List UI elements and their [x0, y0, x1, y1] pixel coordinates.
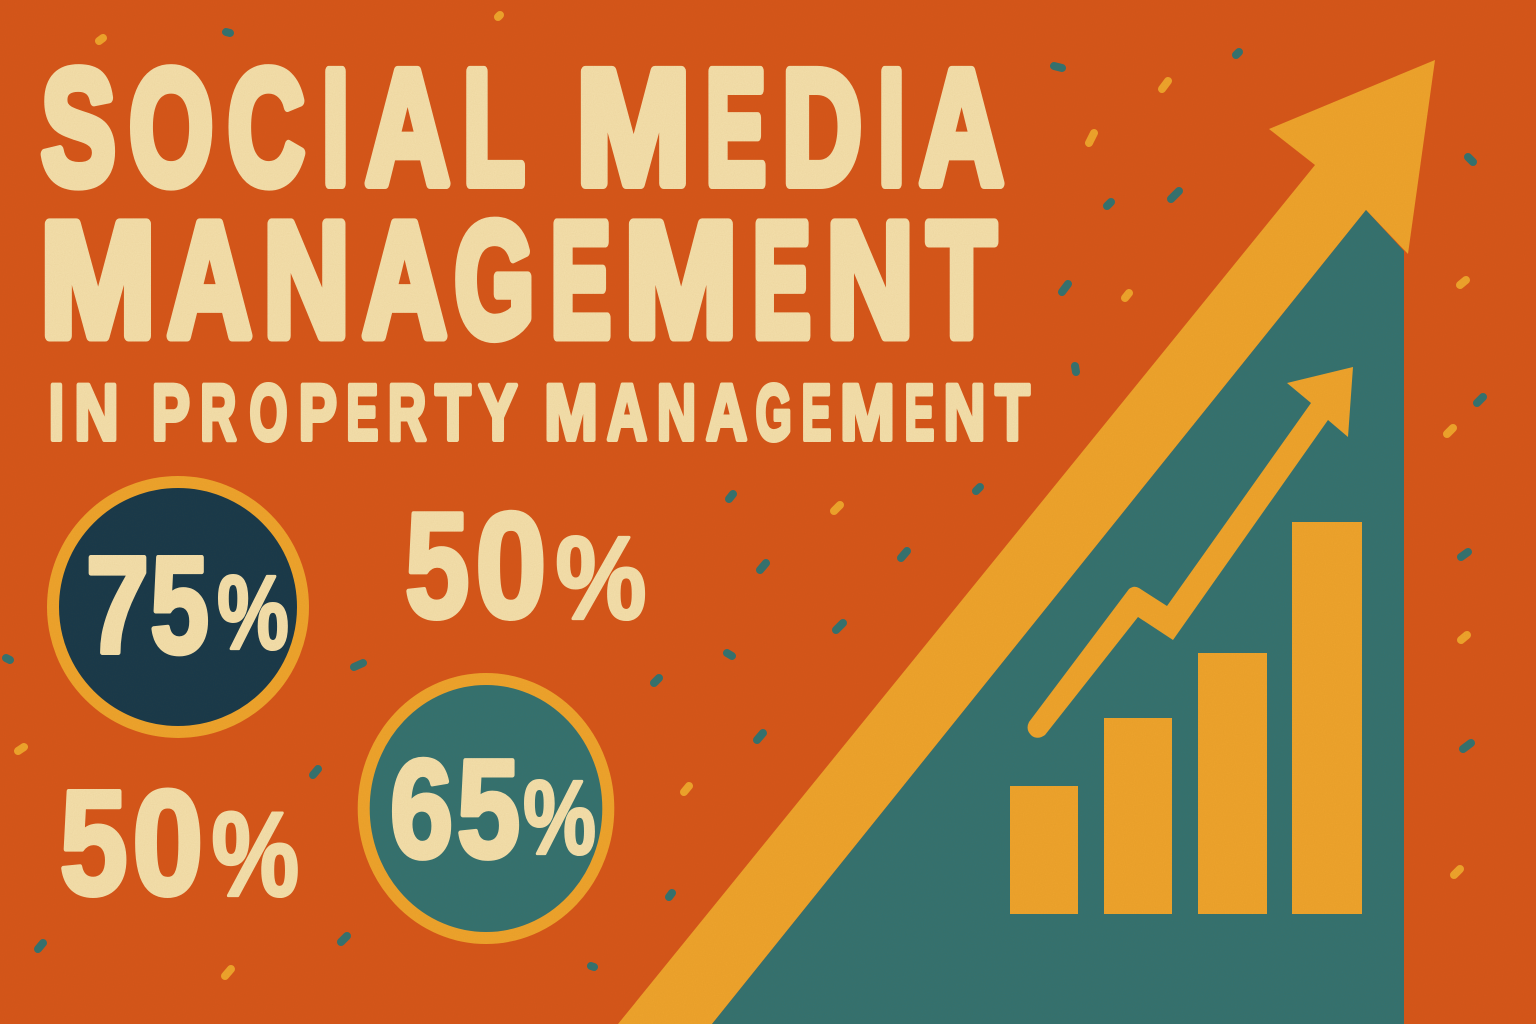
subtitle: N [657, 368, 696, 456]
title: S [41, 36, 116, 218]
title: M [40, 188, 156, 371]
title: M [624, 188, 737, 371]
teal triangle panel [712, 210, 1404, 1024]
title: A [362, 188, 447, 371]
subtitle: R [200, 368, 236, 456]
subtitle: T [435, 368, 471, 456]
subtitle: Y [479, 368, 517, 456]
subtitle: E [904, 368, 934, 456]
title: E [753, 188, 811, 371]
title: A [920, 36, 1004, 218]
subtitle: E [346, 368, 378, 456]
stat: 75% circle: % [217, 554, 289, 672]
stat: 65% circle: % [523, 760, 596, 876]
subtitle: R [388, 368, 426, 456]
title: T [927, 188, 996, 371]
title: N [264, 188, 350, 371]
subtitle: P [299, 368, 337, 456]
subtitle: M [544, 368, 598, 456]
stat: 50% bottom: 5 [60, 759, 128, 926]
title: M [576, 36, 690, 218]
stat: 75% circle: 7 [86, 528, 149, 682]
title: I [878, 36, 905, 218]
title: G [454, 188, 534, 371]
stat: 50% bottom: 0 [132, 759, 203, 926]
subtitle: G [756, 368, 792, 456]
title: O [129, 36, 213, 218]
title: N [826, 188, 914, 371]
stat: 65% circle: 6 [390, 730, 453, 887]
small trend arrow [1028, 367, 1353, 738]
title: C [228, 36, 305, 218]
stat: 75% circle [53, 482, 303, 732]
subtitle: E [802, 368, 831, 456]
title: I [322, 36, 349, 218]
title: A [366, 36, 450, 218]
subtitle: M [840, 368, 895, 456]
subtitle: O [250, 368, 288, 456]
title: L [463, 36, 523, 218]
stat: 50% bottom: % [212, 788, 299, 922]
subtitle: P [152, 368, 190, 456]
stat: 65% circle: 5 [457, 730, 520, 887]
title: E [705, 36, 766, 218]
title: D [782, 36, 862, 218]
title [40, 36, 1004, 371]
stat: 50% top: 5 [405, 481, 470, 649]
bar chart [1010, 522, 1362, 914]
title: E [550, 188, 611, 371]
subtitle: I [49, 368, 64, 456]
title: A [168, 188, 252, 371]
stat: 65% circle [364, 679, 608, 938]
stat: 75% circle: 5 [150, 528, 209, 682]
subtitle: T [995, 368, 1030, 456]
stat: 50% top: % [556, 512, 646, 644]
subtitle: A [607, 368, 647, 456]
subtitle: N [944, 368, 985, 456]
subtitle: N [74, 368, 119, 456]
big growth arrow [618, 60, 1435, 1024]
subtitle: A [706, 368, 747, 456]
stat: 50% top: 0 [475, 481, 547, 649]
